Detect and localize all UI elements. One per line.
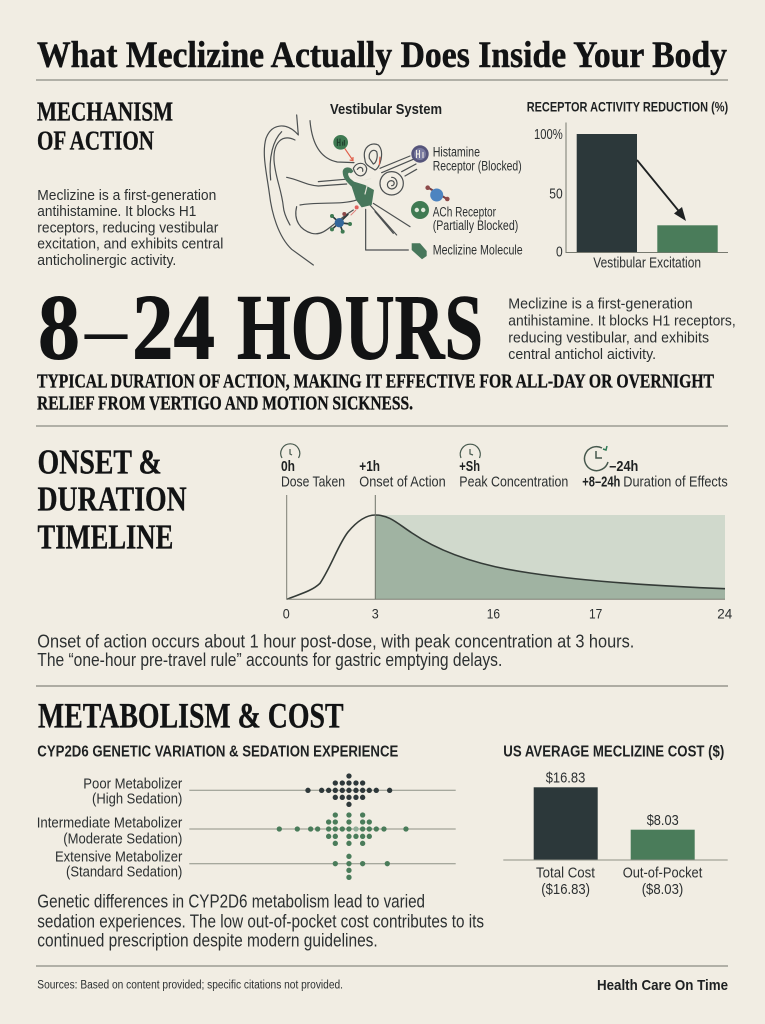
row labels: Intermediate Metabolizer (37, 815, 182, 832)
axis labels: 50 (549, 186, 563, 202)
text block: mechanism description: anticholinergic activity. (37, 252, 176, 269)
text block: stat description: Meclizine is a first-generation (508, 295, 693, 312)
heading: mechanism of action (37, 97, 173, 156)
dot plot: metabolizer sedation (37, 773, 456, 881)
heading: timeline: ONSET & (38, 442, 162, 481)
icons: clocks (281, 444, 608, 471)
cost labels: Out-of-Pocket (623, 864, 703, 881)
icon: molecule left (330, 212, 352, 234)
timeline labels: +1h (359, 459, 380, 475)
chart: concentration curve (283, 495, 733, 621)
text block: stat description: reducing vestibular, and exhibits (508, 329, 709, 346)
timeline labels: Duration of Effects (623, 475, 728, 491)
cost labels: $16.83 (546, 770, 585, 787)
heading: mechanism of action: OF ACTION (37, 126, 154, 156)
big stat: duration: 8 (38, 276, 80, 379)
text block: onset explanation: Onset of action occurs about 1 hour post-dose, with peak concentration at 3 hours. (37, 632, 634, 652)
timeline labels: +8–24h (582, 475, 620, 491)
callout: duration statement (37, 371, 715, 414)
row labels: (Moderate Sedation) (63, 830, 182, 847)
text block: mechanism description: antihistamine. It blocks H1 (37, 203, 196, 220)
text block: onset explanation (37, 632, 634, 670)
panel: metabolism and cost (37, 696, 728, 951)
legend: meclizine molecule (412, 242, 523, 259)
bar chart: meclizine cost (503, 744, 728, 898)
axis labels: 100% (534, 127, 563, 143)
legend: ACh receptor: (Partially Blocked) (433, 218, 518, 233)
legend: histamine receptor: Receptor (Blocked) (433, 159, 522, 174)
row labels: (High Sedation) (92, 790, 182, 807)
cost labels: ($16.83) (541, 881, 590, 898)
timeline labels: Onset of Action (359, 475, 446, 491)
timeline labels (281, 459, 728, 491)
text block: mechanism description: receptors, reducing vestibular (37, 219, 218, 236)
chart: concentration curve: 16 (487, 605, 500, 621)
timeline labels: –24h (609, 459, 638, 475)
footer: brand: Health Care On Time (597, 977, 728, 994)
bar: out of pocket (631, 830, 695, 860)
big stat: duration: 24 (132, 276, 215, 379)
heading: timeline: TIMELINE (38, 517, 173, 556)
heading: mechanism of action: MECHANISM (37, 97, 173, 127)
timeline labels: 0h (281, 459, 295, 475)
heading: timeline: DURATION (38, 480, 187, 519)
big stat: duration: HOURS (237, 276, 483, 379)
bar: before (577, 134, 637, 252)
chart: concentration curve: 0 (283, 605, 290, 621)
text block: mechanism description: excitation, and exhibits central (37, 235, 223, 252)
panel: onset and duration timeline (37, 442, 733, 670)
footer: sources: Sources: Based on content provided; specific citations not provided. (37, 980, 343, 992)
legend: histamine receptor: Histamine (433, 145, 480, 160)
icon: blocked receptor green (333, 135, 348, 150)
big stat: duration: – (84, 276, 128, 379)
heading: timeline (38, 442, 187, 556)
text block: stat description: antihistamine. It blocks H1 receptors, (508, 313, 736, 330)
text block: metabolism explanation: continued prescription despite modern guidelines. (37, 931, 378, 951)
chart heading: US AVERAGE MECLIZINE COST ($) (503, 744, 724, 761)
cost labels: $8.03 (647, 812, 679, 829)
diagram heading: Vestibular System (330, 102, 442, 118)
text block: mechanism description: Meclizine is a first-generation (37, 187, 216, 204)
text block: stat description: central antichol aictivity. (508, 346, 656, 363)
heading: metabolism and cost: METABOLISM & COST (38, 696, 344, 736)
text block: metabolism explanation: Genetic differences in CYP2D6 metabolism lead to varied (37, 892, 425, 912)
text block: mechanism description (37, 187, 223, 269)
cost labels: Total Cost (536, 864, 596, 881)
cost labels: ($8.03) (642, 881, 683, 898)
icon: molecule right (425, 185, 450, 202)
icon: ear anatomy (264, 115, 417, 265)
text block: onset explanation: The “one-hour pre-travel rule” accounts for gastric emptying delays. (37, 650, 502, 670)
panel: mechanism of action (37, 97, 223, 269)
bar chart: receptor activity reduction (527, 99, 728, 272)
text block: metabolism explanation: sedation experiences. The low out-of-pocket cost contributes to its (37, 911, 484, 931)
axis labels: Vestibular Excitation (593, 256, 701, 272)
bar: after (657, 225, 718, 252)
text block: metabolism explanation (37, 892, 484, 951)
timeline labels: +Sh (459, 459, 480, 475)
subheading: CYP2D6: CYP2D6 GENETIC VARIATION & SEDATION EXPERIENCE (37, 743, 399, 760)
chart: concentration curve: 17 (589, 605, 602, 621)
callout: duration statement: RELIEF FROM VERTIGO AND MOTION SICKNESS. (37, 392, 413, 414)
row labels (37, 775, 182, 881)
timeline labels: Peak Concentration (459, 475, 568, 491)
legend: ACh receptor (411, 201, 518, 233)
dots: poor (305, 773, 392, 807)
row labels: Poor Metabolizer (83, 775, 182, 792)
legend: ACh receptor: ACh Receptor (433, 205, 496, 220)
timeline labels: Dose Taken (281, 475, 345, 491)
row labels: (Standard Sedation) (66, 864, 182, 881)
axis labels (534, 127, 701, 272)
bar: total cost (534, 787, 598, 860)
diagram: vestibular system (264, 102, 523, 265)
chart: concentration curve: 24 (717, 605, 733, 621)
chart: concentration curve: 3 (372, 605, 379, 621)
arrow (637, 160, 686, 221)
row labels: Extensive Metabolizer (55, 849, 182, 866)
dots: intermediate (277, 812, 409, 846)
legend: meclizine molecule: Meclizine Molecule (433, 242, 523, 257)
axis labels: 0 (556, 245, 563, 261)
legend: histamine receptor (411, 145, 522, 174)
text block: stat description (508, 295, 736, 363)
dots: extensive (333, 854, 390, 880)
cost labels (536, 770, 703, 898)
